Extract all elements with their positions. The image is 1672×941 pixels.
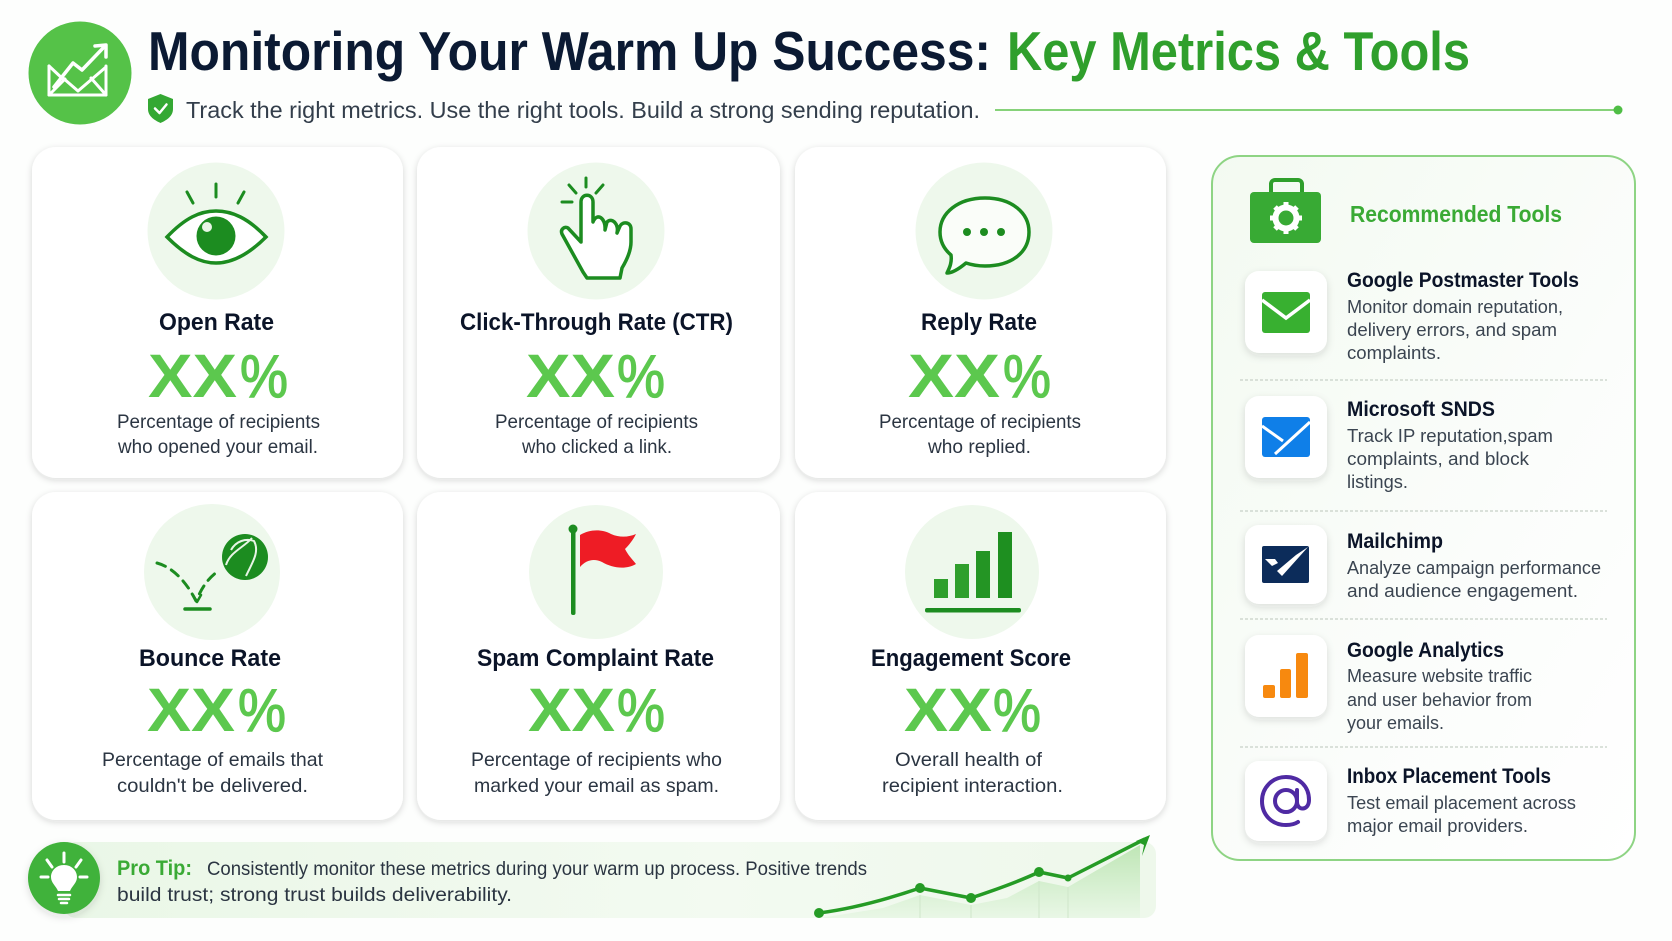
icon: blue envelope <box>1262 417 1310 457</box>
metric value <box>148 342 288 410</box>
tool: inbox placement: Test email placement across <box>1347 793 1576 813</box>
panel: click-through rate: Click-Through Rate (CTR) <box>460 309 733 336</box>
metric value: % <box>238 677 286 744</box>
tool: google analytics: Google Analytics <box>1347 639 1504 662</box>
icon: bar chart <box>905 505 1039 639</box>
tool: microsoft snds: Microsoft SNDS <box>1347 398 1495 421</box>
metric value: XX <box>526 342 615 410</box>
metric value: % <box>240 343 288 410</box>
tool: inbox placement: Inbox Placement Tools <box>1347 765 1551 788</box>
panel: spam complaint rate <box>417 492 780 820</box>
metric value <box>526 342 665 410</box>
tool: microsoft snds <box>1245 396 1553 492</box>
panel: bounce rate: couldn't be delivered. <box>117 775 308 797</box>
callout: pro tip: Consistently monitor these metrics during your warm up process. Positive trends <box>207 858 867 880</box>
tool: google postmaster: Monitor domain reputation, <box>1347 297 1563 317</box>
icon: eye <box>148 162 284 300</box>
panel: bounce rate: Percentage of emails that <box>102 749 324 771</box>
title: Key Metrics & Tools <box>1007 20 1470 82</box>
icon: speech bubble <box>916 162 1052 300</box>
icon: pointing hand <box>528 162 664 300</box>
panel: spam complaint rate: marked your email as spam. <box>474 775 719 797</box>
icon: at sign <box>1262 777 1309 825</box>
icon: shield check <box>148 94 173 123</box>
tool: mailchimp: Mailchimp <box>1347 530 1443 553</box>
panel: engagement score: Engagement Score <box>871 645 1071 672</box>
panel: engagement score <box>795 492 1166 820</box>
metric value: % <box>993 677 1041 744</box>
header rule with end dot <box>995 106 1622 114</box>
icon: red flag <box>529 505 663 639</box>
panel: click-through rate <box>417 147 780 478</box>
metric value: XX <box>147 676 235 744</box>
panel: click-through rate: who clicked a link. <box>521 436 672 458</box>
metric value: XX <box>908 342 1000 410</box>
callout: pro tip: Pro Tip: <box>117 857 192 880</box>
tool: mailchimp: and audience engagement. <box>1347 581 1578 601</box>
metric value: % <box>617 677 665 744</box>
metric value <box>904 676 1041 744</box>
panel: reply rate <box>795 147 1166 478</box>
metric value: % <box>1003 343 1051 410</box>
icon: bouncing ball <box>144 504 280 640</box>
panel: recommended tools: Recommended Tools <box>1350 201 1562 227</box>
tool: mailchimp: Analyze campaign performance <box>1347 558 1601 578</box>
panel: engagement score: Overall health of <box>895 749 1043 771</box>
icon: navy envelope with check <box>1262 546 1309 583</box>
tool: microsoft snds: listings. <box>1347 472 1408 492</box>
metric value: % <box>617 343 665 410</box>
panel: reply rate: Percentage of recipients <box>879 411 1081 433</box>
panel: reply rate: Reply Rate <box>921 309 1037 336</box>
tool: google postmaster: complaints. <box>1347 343 1441 363</box>
tool: google postmaster <box>1245 269 1579 363</box>
panel: spam complaint rate: Percentage of recipients who <box>471 749 722 771</box>
title: Monitoring Your Warm Up Success: <box>148 20 991 82</box>
tool: google postmaster: Google Postmaster Tools <box>1347 269 1579 292</box>
panel: reply rate: who replied. <box>927 436 1031 458</box>
metric value <box>528 676 665 744</box>
metric value <box>147 676 286 744</box>
tool: google analytics <box>1245 635 1532 733</box>
tool: google analytics: Measure website traffic <box>1347 666 1532 686</box>
metric value: XX <box>904 676 992 744</box>
icon: orange bars <box>1263 653 1308 698</box>
callout: pro tip: build trust; strong trust builds deliverability. <box>117 884 512 906</box>
tool: google analytics: your emails. <box>1347 713 1444 733</box>
tool: google analytics: and user behavior from <box>1347 690 1532 710</box>
metric value: XX <box>528 676 615 744</box>
chart: rising trend line <box>814 835 1150 918</box>
tool: mailchimp <box>1245 525 1601 604</box>
tool: microsoft snds: Track IP reputation,spam <box>1347 426 1553 446</box>
tool: microsoft snds: complaints, and block <box>1347 449 1530 469</box>
panel: open rate: Open Rate <box>159 309 274 336</box>
subtitle: Track the right metrics. Use the right tools. Build a strong sending reputation. <box>186 97 980 123</box>
panel: spam complaint rate: Spam Complaint Rate <box>477 645 714 672</box>
panel: open rate <box>32 147 403 478</box>
tool: google postmaster: delivery errors, and spam <box>1347 320 1557 340</box>
icon: toolbox with gear <box>1250 180 1321 243</box>
metric value <box>908 342 1051 410</box>
callout: pro tip <box>28 835 1156 918</box>
panel: open rate: Percentage of recipients <box>117 411 320 433</box>
metric value: XX <box>148 342 237 410</box>
panel: click-through rate: Percentage of recipients <box>495 411 698 433</box>
logo: envelope with rising arrow <box>28 22 132 124</box>
panel: bounce rate <box>32 492 403 820</box>
panel: recommended tools <box>1212 156 1635 860</box>
panel: open rate: who opened your email. <box>117 436 318 458</box>
panel: bounce rate: Bounce Rate <box>139 645 281 672</box>
panel: engagement score: recipient interaction. <box>882 775 1063 797</box>
tool: inbox placement: major email providers. <box>1347 816 1528 836</box>
icon: green envelope <box>1262 292 1310 333</box>
icon: light bulb <box>28 842 100 914</box>
tool: inbox placement <box>1245 761 1576 841</box>
